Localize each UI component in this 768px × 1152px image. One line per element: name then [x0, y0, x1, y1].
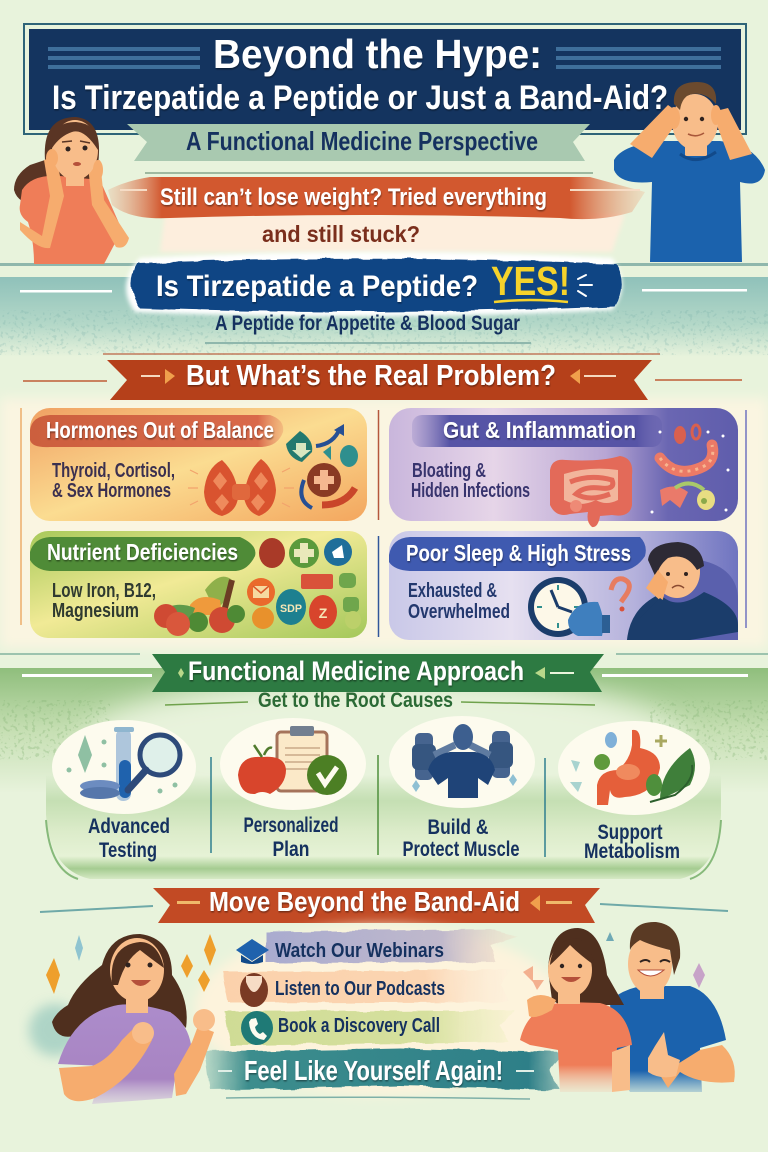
label: Plan [272, 838, 310, 861]
section background: problem [0, 398, 768, 648]
root causes subheading: Get to the Root Causes [258, 689, 453, 712]
body text [408, 580, 510, 623]
step: support metabolism [558, 721, 710, 863]
body text: Magnesium [52, 600, 139, 622]
label: Protect Muscle [402, 838, 520, 861]
section ribbon: functional medicine: Functional Medicine Approach [188, 656, 524, 686]
action: podcasts [222, 970, 512, 1007]
label: Metabolism [584, 840, 680, 863]
action: webinars [236, 929, 518, 964]
root causes subheading [165, 689, 595, 712]
approach frame [46, 775, 721, 879]
heading: Nutrient Deficiencies [47, 539, 238, 565]
panel: sleep and stress [389, 531, 738, 640]
heading [30, 415, 283, 447]
subtitle ribbon: A Functional Medicine Perspective [186, 126, 538, 156]
heading: Gut & Inflammation [443, 417, 636, 443]
body text: Hidden Infections [411, 480, 530, 502]
YES word: YES! [491, 258, 570, 304]
question text: Is Tirzepatide a Peptide? [156, 270, 478, 303]
body text: Thyroid, Cortisol, [52, 460, 175, 482]
panel: gut [389, 408, 738, 527]
section ribbon: band-aid [40, 886, 728, 923]
YES banner [126, 252, 622, 317]
icon: supplements: SDP [280, 603, 302, 615]
sub-caption: A Peptide for Appetite & Blood Sugar [215, 312, 520, 335]
subtitle ribbon [127, 124, 590, 161]
body text: Exhausted & [408, 580, 497, 602]
panel: hormones [30, 408, 367, 521]
icon: intestines [550, 456, 632, 527]
icon circle [52, 720, 196, 814]
step: build muscle [389, 716, 535, 861]
body text [52, 580, 156, 622]
icon: vegetables [154, 577, 245, 636]
section ribbon background: approach [0, 653, 768, 815]
hook banner [108, 172, 645, 252]
figure: tired man [627, 542, 738, 640]
sparkles [46, 934, 216, 994]
section ribbon: functional medicine [152, 654, 604, 692]
hook line 1: Still can’t lose weight? Tried everything [160, 184, 547, 211]
woman [520, 928, 632, 1092]
icon circle [389, 716, 535, 808]
label: Build & [428, 816, 488, 839]
body text [411, 460, 530, 502]
body text: Low Iron, B12, [52, 580, 156, 602]
man [610, 922, 735, 1092]
action: webinars: Watch Our Webinars [275, 940, 444, 962]
icon: thyroid [188, 459, 294, 516]
closing banner: Feel Like Yourself Again! [244, 1055, 503, 1086]
label: Personalized [244, 814, 338, 837]
label: Support [598, 821, 663, 844]
teal band background [0, 263, 768, 357]
icon: supplements: Z [319, 605, 328, 621]
label: Advanced [88, 815, 170, 838]
icon circle [220, 718, 366, 810]
body text: & Sex Hormones [52, 480, 171, 502]
closing banner [205, 1048, 565, 1090]
title line 1: Beyond the Hype: [213, 31, 542, 77]
woman with hands on head [14, 117, 129, 264]
title line 2: Is Tirzepatide a Peptide or Just a Band-Aid? [52, 79, 668, 117]
heading: Hormones Out of Balance [46, 417, 274, 443]
heading [30, 537, 255, 571]
icon: question mark [611, 579, 629, 612]
heading [412, 415, 662, 447]
label [88, 815, 170, 862]
figure: happy woman [29, 934, 216, 1104]
section ribbon: real problem: But What’s the Real Problem? [186, 360, 556, 392]
hook line 2: and still stuck? [262, 221, 420, 247]
action: discovery call: Book a Discovery Call [278, 1015, 440, 1037]
heading [389, 537, 646, 571]
action: discovery call [224, 1010, 515, 1045]
step: personalized plan [220, 718, 366, 861]
body text: Bloating & [412, 460, 486, 482]
step: advanced testing [52, 720, 196, 862]
heading: Poor Sleep & High Stress [406, 540, 631, 566]
icon: supplements [247, 538, 361, 629]
panel: nutrients [30, 531, 367, 638]
icon circle [558, 721, 710, 815]
icon: hormone symbols [286, 424, 358, 508]
man with hands on head [614, 82, 765, 262]
title banner [24, 24, 746, 134]
icon: clock [528, 577, 610, 637]
label [402, 816, 520, 861]
body text: Overwhelmed [408, 601, 510, 623]
icon: inflamed bowel and microbes [650, 425, 730, 514]
label [584, 821, 680, 863]
call-to-action list [195, 925, 565, 1099]
figure: happy couple [520, 922, 735, 1092]
section ribbon: band-aid: Move Beyond the Band-Aid [209, 886, 520, 917]
body text [52, 460, 175, 502]
action: podcasts: Listen to Our Podcasts [275, 978, 445, 1000]
label: Testing [99, 839, 157, 862]
section ribbon: real problem [23, 354, 742, 400]
label [244, 814, 338, 861]
